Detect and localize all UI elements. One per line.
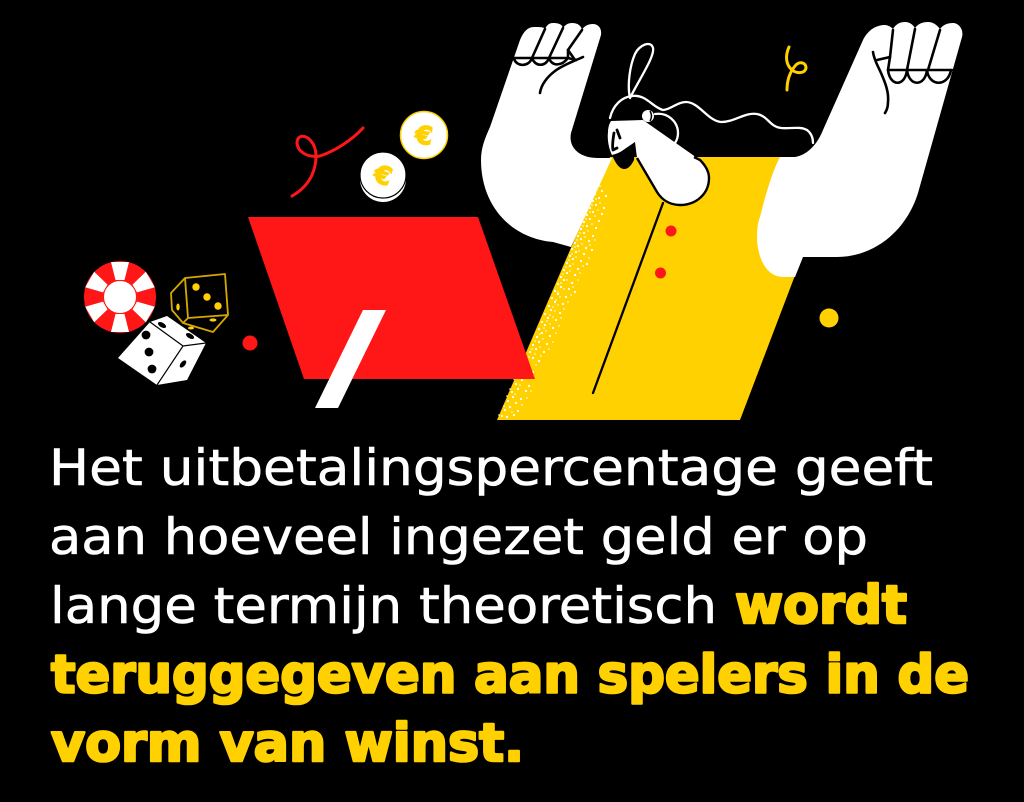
right raised arm [757,22,962,277]
highlighted text line 4: teruggegeven aan spelers in de [51,644,969,706]
highlighted text line 5: vorm van winst. [51,713,524,774]
casino chip [84,261,156,333]
text line 1: Het uitbetalingspercentage geeft [49,439,933,497]
euro coin stack [360,152,406,202]
outlined yellow die [171,274,228,332]
woman's yellow body [497,157,802,420]
highlighted text: wordt: wordt [735,575,907,636]
red dot [242,336,258,350]
ear [642,110,654,122]
woman's head and neck [608,110,709,205]
euro coin top: € [412,120,435,151]
euro coin top [400,112,448,158]
white die [118,316,206,385]
explanatory text block [49,439,969,774]
red squiggle [292,128,363,196]
illustration: woman at laptop with casino items [84,22,962,420]
left hand finger lines [513,28,583,93]
woman's hair strands [610,44,813,143]
shirt seam line [593,203,663,393]
left raised arm [481,23,612,247]
beard [612,142,635,169]
yellow squiggle [787,47,806,90]
euro coin stack: € [369,159,396,192]
right hand finger lines [873,29,952,113]
red buttons [655,226,676,278]
white laptop base [315,310,386,408]
yellow dot [820,308,838,328]
text line 2: aan hoeveel ingezet geld er op [49,508,868,566]
eye and nose [613,130,620,150]
red laptop screen [248,217,535,379]
text line 3: lange termijn theoretisch [50,577,717,635]
